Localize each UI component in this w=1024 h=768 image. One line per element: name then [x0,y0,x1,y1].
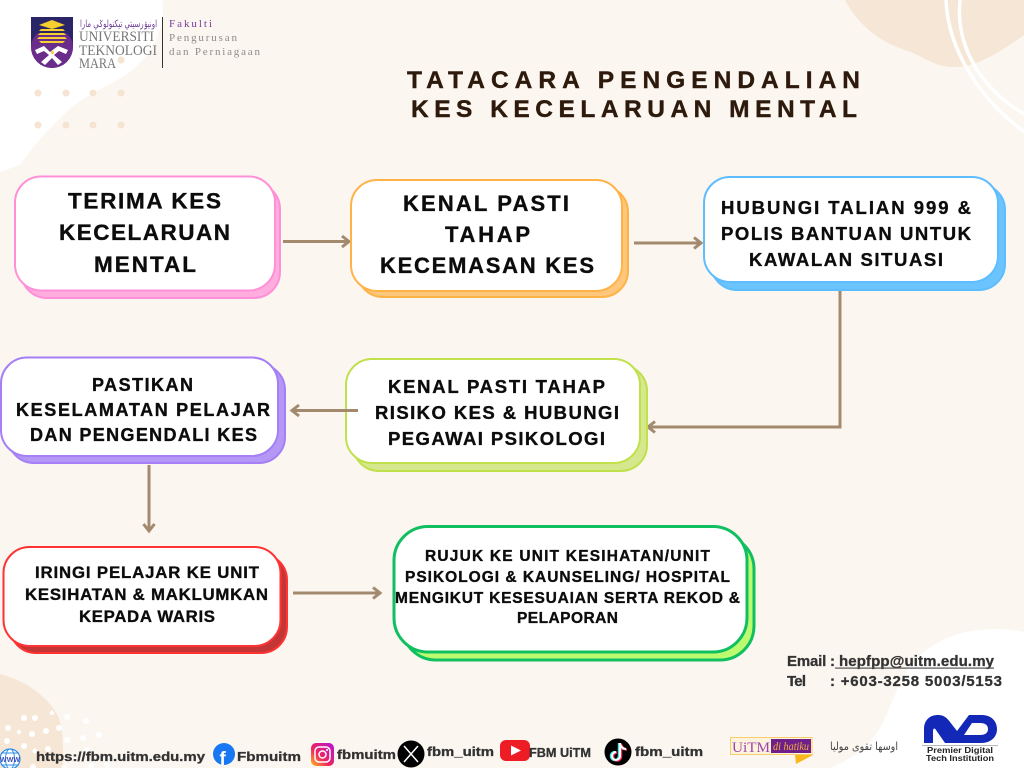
faculty name: Pengurusan [169,32,238,44]
panel: step 4 kenal pasti tahap risiko [346,359,647,471]
logo: UiTM di hatiku [730,738,813,764]
arrow: step 3 to 4 [648,291,840,432]
panel: step 2 kenal pasti tahap kecemasan: KENAL PASTI [403,191,569,216]
decorative dots bottom left [4,711,110,768]
white blob bottom right [830,629,1024,768]
beige blob bottom left [0,674,63,768]
panel: step 3 hubungi talian 999 [704,177,1005,290]
panel: step 5 pastikan keselamatan: DAN PENGENDALI KES [30,425,257,445]
tiktok handle: fbm_uitm [635,745,703,759]
logo: UiTM Fakulti Pengurusan dan Perniagaan [31,17,260,72]
jawi university name: اونيۏرسيتي تيكنولوݢي مارا [80,19,157,30]
university name: MARA [79,56,116,72]
panel: step 6 iringi pelajar: KESIHATAN & MAKLUMKAN [25,585,268,604]
panel: step 7 rujuk ke unit kesihatan: PELAPORAN [517,610,618,627]
facebook handle: Fbmuitm [237,749,301,764]
panel: step 4 kenal pasti tahap risiko: PEGAWAI PSIKOLOGI [388,428,605,449]
contact details [787,653,1002,690]
icon: website globe: WWW [0,757,20,764]
faculty name: Fakulti [169,18,212,30]
icon: X [398,740,424,768]
logo: UiTM di hatiku: UiTM [732,740,770,756]
faculty name [169,18,260,58]
panel: step 4 kenal pasti tahap risiko: RISIKO KES & HUBUNGI [375,402,619,423]
icon: youtube [500,740,530,761]
university name [79,29,157,72]
panel: step 3 hubungi talian 999: POLIS BANTUAN UNTUK [721,223,972,244]
icon: UiTM crest [31,17,73,68]
decorative dots top left [34,56,124,128]
university name: TEKNOLOGI [79,43,157,59]
panel: step 2 kenal pasti tahap kecemasan [351,180,628,297]
arrow: step 2 to 3 [634,238,701,248]
panel: step 3 hubungi talian 999: HUBUNGI TALIAN 999 & [721,197,971,218]
faculty name: dan Perniagaan [169,46,260,58]
panel: step 1 terima kes [15,176,280,298]
icon: instagram [311,743,334,766]
arrow: step 1 to 2 [283,236,349,247]
icon: tiktok [604,738,632,766]
logo: Premier Digital Tech Institution: Premier Digital [927,746,993,755]
panel: step 2 kenal pasti tahap kecemasan: TAHAP [445,222,530,247]
panel: step 7 rujuk ke unit kesihatan: PSIKOLOGI & KAUNSELING/ HOSPITAL [405,569,730,586]
title: TATACARA PENGENDALIAN [407,67,860,94]
icon: website globe [0,749,20,768]
white blob top left [0,0,163,172]
panel: step 3 hubungi talian 999: KAWALAN SITUASI [749,249,943,270]
contact details: : +603-3258 5003/5153 [830,673,1002,690]
university name: UNIVERSITI [79,29,154,45]
panel: step 5 pastikan keselamatan [1,358,285,463]
logo: UiTM di hatiku: di hatiku [773,741,809,753]
panel: step 1 terima kes: KECELARUAN [59,220,230,245]
panel: step 5 pastikan keselamatan: KESELAMATAN PELAJAR [16,400,270,420]
jawi motto: اوسها تقوى موليا [830,740,898,753]
panel: step 7 rujuk ke unit kesihatan: MENGIKUT KESESUAIAN SERTA REKOD & [395,590,740,607]
youtube handle: FBM UiTM [529,746,591,760]
X handle: fbm_uitm [427,745,494,759]
panel: step 2 kenal pasti tahap kecemasan: KECEMASAN KES [380,253,594,278]
logo divider [162,17,163,68]
website link: https://fbm.uitm.edu.my [36,749,206,764]
arrow: step 6 to 7 [293,588,380,598]
contact details: Tel [787,673,806,690]
panel: step 1 terima kes: MENTAL [94,252,196,277]
title [407,67,860,123]
contact details: hepfpp@uitm.edu.my [839,653,995,670]
panel: step 6 iringi pelajar: KEPADA WARIS [79,607,215,626]
arrow: step 5 to 6 [144,465,154,531]
panel: step 1 terima kes: TERIMA KES [68,188,221,214]
panel: step 7 rujuk ke unit kesihatan [394,526,754,660]
beige blob top right [845,0,1024,67]
title: KES KECELARUAN MENTAL [411,96,857,123]
panel: step 5 pastikan keselamatan: PASTIKAN [92,375,193,395]
icon: facebook [213,743,235,768]
panel: step 6 iringi pelajar: IRINGI PELAJAR KE UNIT [35,563,260,582]
logo: Premier Digital Tech Institution: Tech Institution [926,754,994,763]
instagram handle: fbmuitm [337,748,396,762]
contact details: Email : [787,653,835,670]
arrow: step 4 to 5 [292,405,358,416]
panel: step 4 kenal pasti tahap risiko: KENAL PASTI TAHAP [388,376,605,397]
logo: Premier Digital Tech Institution [922,715,998,763]
panel: step 7 rujuk ke unit kesihatan: RUJUK KE UNIT KESIHATAN/UNIT [425,548,711,565]
panel: step 6 iringi pelajar [4,547,287,653]
white rings top right [946,0,1024,133]
